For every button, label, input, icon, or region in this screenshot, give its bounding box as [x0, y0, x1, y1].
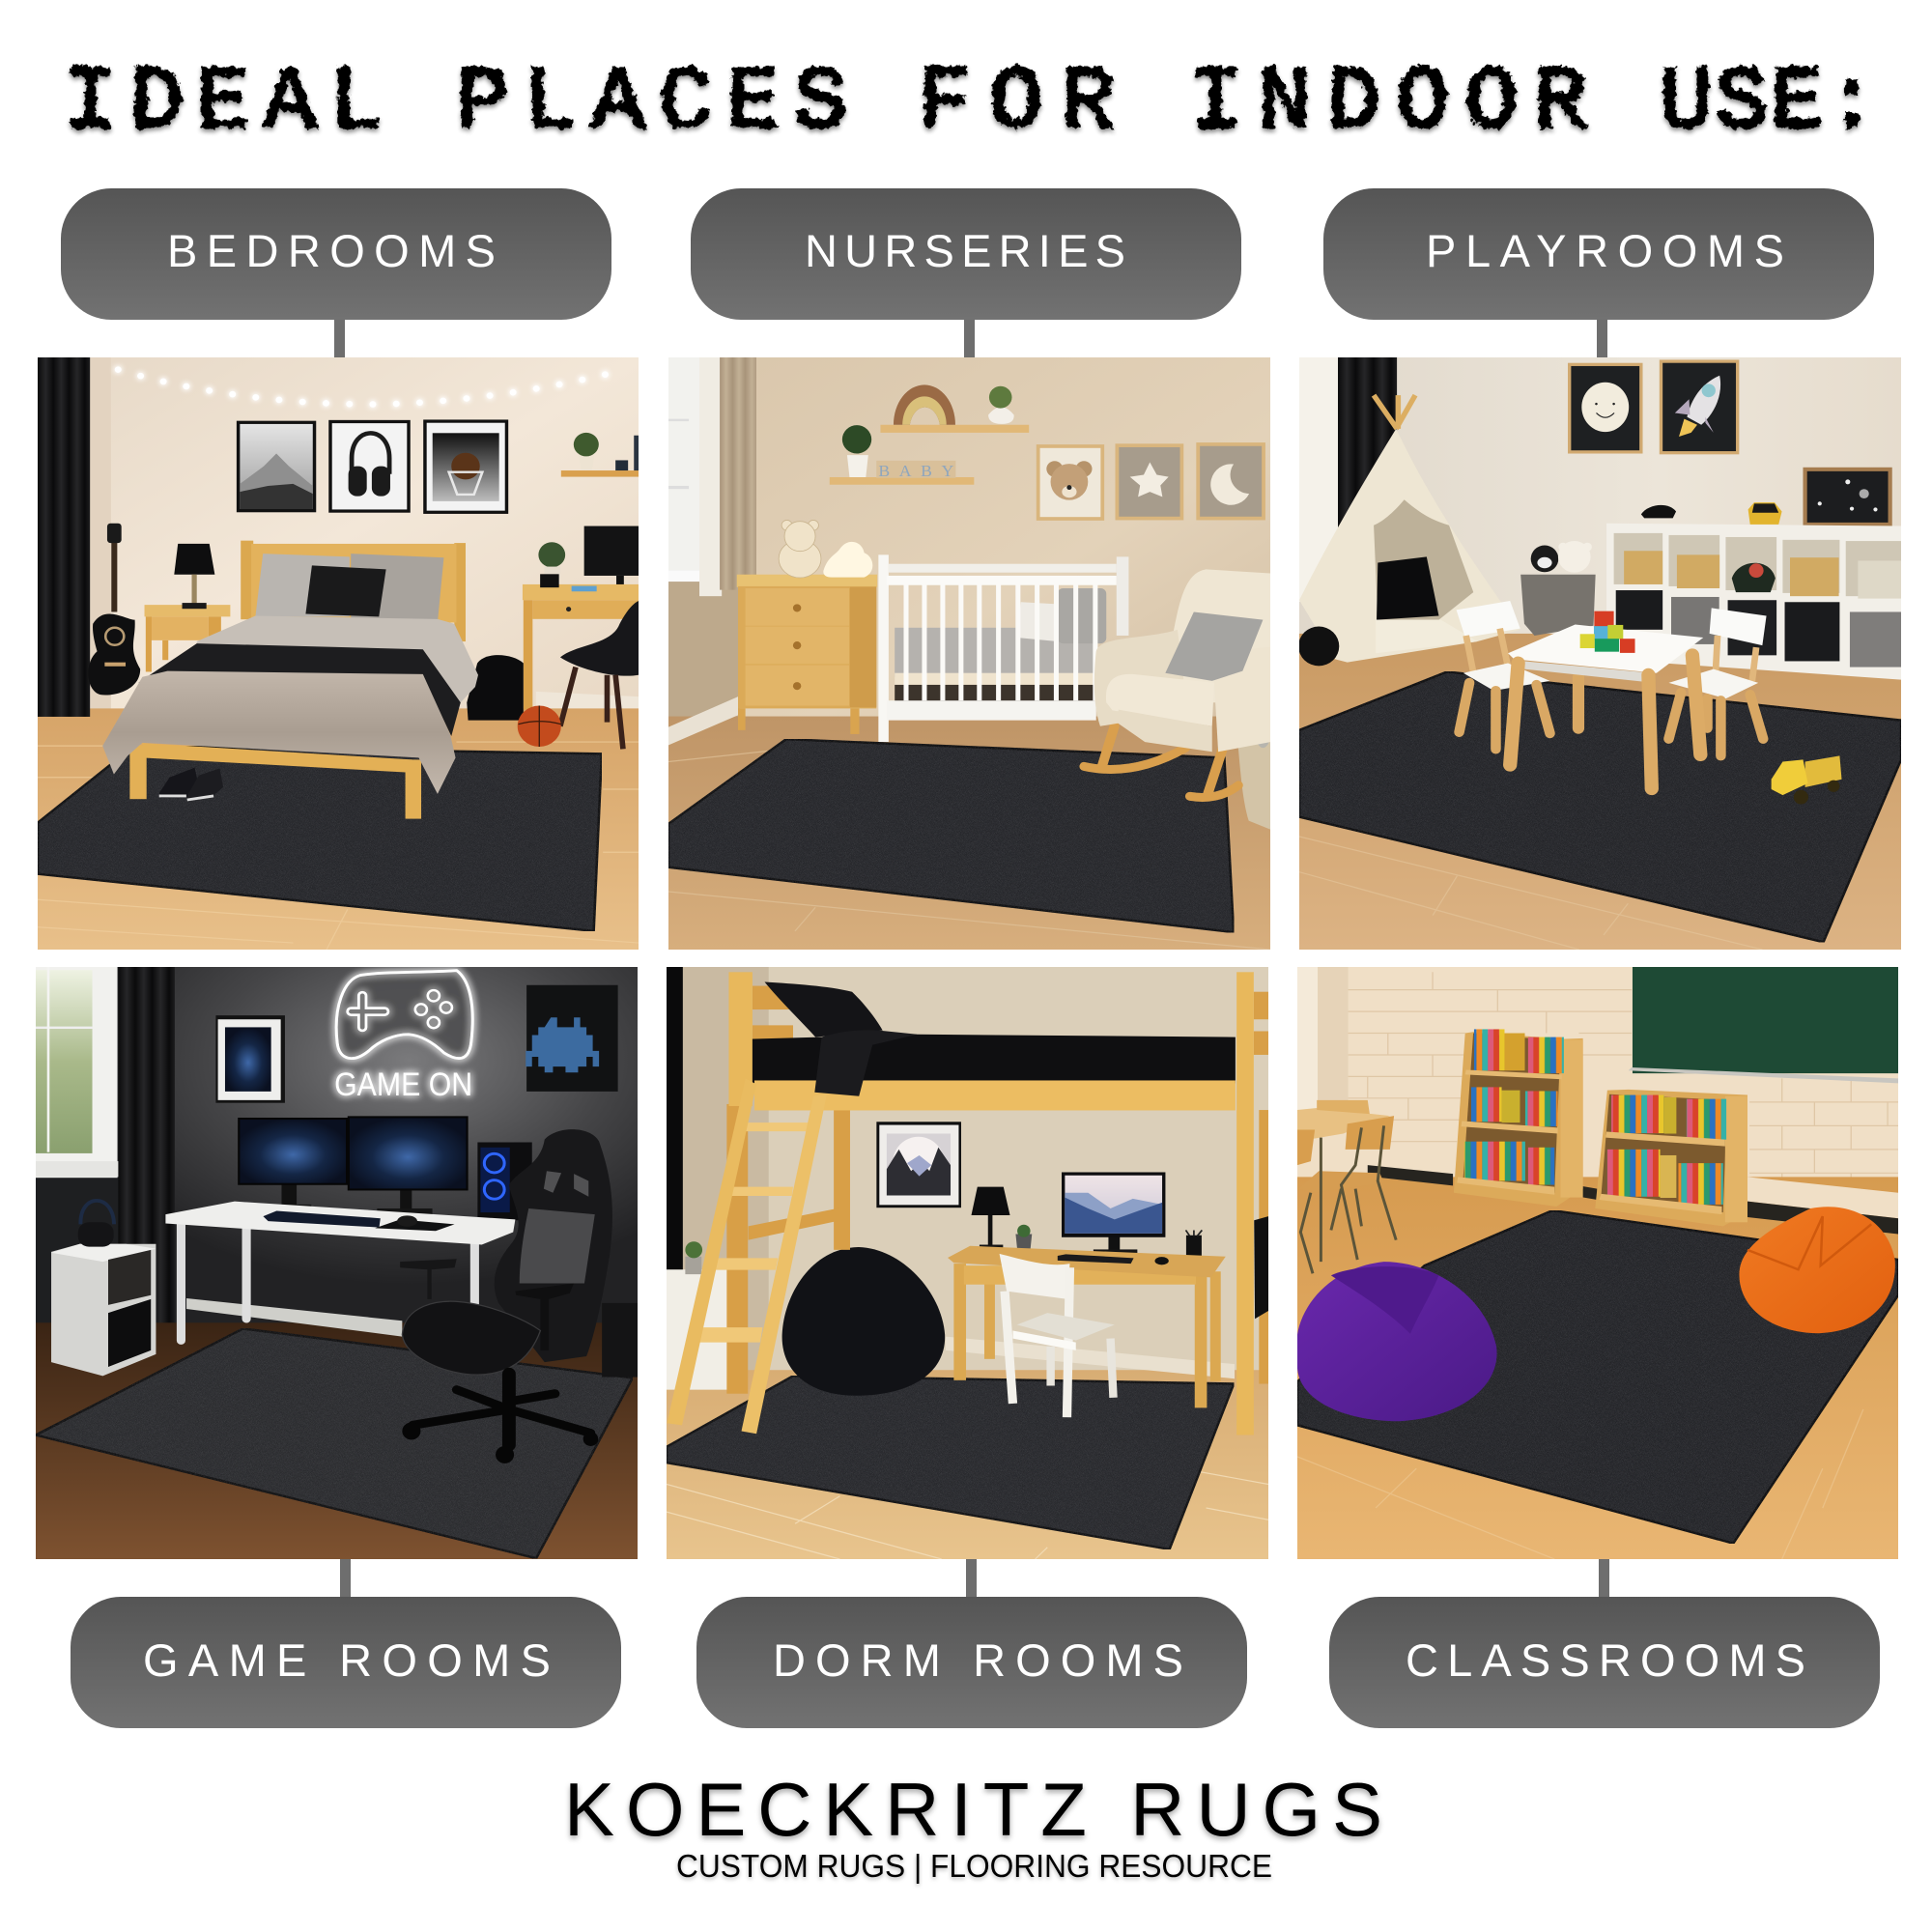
monitors	[239, 1117, 468, 1215]
label: game rooms: GAME ROOMS	[143, 1634, 551, 1686]
shelf lower: BABY	[878, 461, 954, 480]
blanket	[814, 1030, 917, 1096]
pen holder	[1185, 1230, 1202, 1257]
pillows	[255, 554, 443, 622]
window	[36, 967, 120, 1178]
label: nurseries	[691, 188, 1241, 357]
toy cars	[1641, 502, 1782, 525]
teddy bear	[779, 520, 821, 578]
purple beanbag	[1297, 1262, 1497, 1421]
dark curtain	[1338, 357, 1397, 530]
loft bed back rails	[726, 986, 1268, 1394]
basketball	[518, 706, 561, 747]
title: PLACES	[456, 52, 847, 154]
art: mountains	[876, 1122, 961, 1208]
table lamp	[174, 544, 214, 609]
rug	[36, 1328, 633, 1558]
title: USE:	[1660, 52, 1879, 154]
play table	[1508, 625, 1703, 788]
label: playrooms	[1323, 188, 1874, 357]
tall bookcase	[1454, 1029, 1583, 1207]
chalkboard	[1629, 967, 1898, 1083]
label: classrooms: CLASSROOMS	[1406, 1634, 1805, 1686]
yellow toy truck	[1772, 755, 1842, 805]
shelf upper	[880, 384, 1029, 433]
string lights	[118, 370, 616, 405]
panel: bedroom photo	[38, 357, 639, 950]
nightstand	[145, 605, 230, 671]
orange beanbag	[1739, 1207, 1895, 1333]
rug	[1299, 671, 1901, 942]
sheer curtain	[699, 357, 722, 596]
wall art: mountain	[237, 421, 316, 512]
loft mattress	[750, 1035, 1236, 1083]
label: classrooms	[1329, 1559, 1880, 1728]
monitor	[1062, 1172, 1165, 1254]
desk	[948, 1246, 1226, 1407]
low bookcase	[1595, 1090, 1747, 1226]
table and chairs	[1297, 1100, 1396, 1273]
dresser	[737, 575, 877, 734]
panel: classroom photo	[1297, 967, 1898, 1559]
desk and monitor	[523, 526, 639, 710]
black ball	[1298, 627, 1339, 666]
label: bedrooms: BEDROOMS	[167, 225, 496, 276]
art: bear	[1037, 444, 1104, 521]
bucket with plush toys	[1520, 541, 1596, 636]
label: dorm rooms: DORM ROOMS	[773, 1634, 1183, 1686]
title	[64, 52, 1879, 154]
baseboard	[1368, 1165, 1898, 1235]
table lamp	[972, 1187, 1010, 1250]
backpack	[467, 655, 524, 721]
sheer curtain	[1299, 357, 1338, 602]
left chair	[1457, 601, 1549, 749]
potted plant	[1015, 1225, 1032, 1250]
cube storage	[1606, 524, 1901, 680]
dark crate	[602, 1303, 638, 1378]
wall behind right bookcase	[1747, 1177, 1898, 1218]
rug	[38, 746, 602, 931]
cloud lamp	[823, 542, 872, 578]
loft beam	[754, 1080, 1236, 1110]
label: nurseries: NURSERIES	[805, 225, 1125, 276]
label: dorm rooms	[696, 1559, 1247, 1728]
ladder	[667, 1078, 827, 1434]
panel: game room photo	[36, 967, 638, 1559]
bed headboard	[241, 541, 466, 641]
space invader art	[526, 985, 618, 1092]
art: moon	[1196, 442, 1265, 520]
sneakers	[159, 768, 223, 801]
teepee	[1299, 395, 1520, 663]
art: smiling moon	[1568, 363, 1643, 454]
label: game rooms	[71, 1559, 621, 1728]
framed space art	[215, 1015, 285, 1103]
bag on loft	[1254, 1216, 1268, 1319]
rug	[668, 739, 1234, 932]
right chair	[1668, 608, 1767, 755]
loft posts	[728, 972, 1254, 1435]
wall art: basketball hoop	[423, 419, 508, 514]
panel: nursery photo	[668, 357, 1270, 950]
beanbag	[782, 1247, 945, 1396]
brand name: KOECKRITZ RUGS	[564, 1767, 1382, 1852]
panel: playroom photo	[1299, 357, 1901, 950]
art: star	[1116, 443, 1183, 520]
baseboard	[186, 1298, 402, 1337]
white chair	[1000, 1254, 1115, 1417]
brick lines	[1349, 972, 1898, 1197]
rug	[667, 1376, 1234, 1549]
guitar	[88, 524, 140, 695]
duvet and black throw	[102, 616, 478, 794]
linen curtain	[720, 357, 756, 590]
art: rocket	[1660, 359, 1739, 454]
desk chair	[560, 601, 639, 749]
rocking chair	[1094, 569, 1270, 752]
pc tower	[477, 1142, 532, 1220]
baseboard	[946, 1337, 1235, 1378]
brand tagline: CUSTOM RUGS | FLOORING RESOURCE	[676, 1848, 1272, 1884]
rocking chair rockers	[1084, 726, 1238, 797]
white cabinet and plant	[667, 1241, 727, 1390]
wall shelf	[561, 433, 639, 477]
wicker basket	[1237, 704, 1272, 830]
panel: dorm room photo	[667, 967, 1268, 1559]
gaming chair	[400, 1129, 612, 1463]
rug	[1297, 1210, 1898, 1544]
title: FOR	[918, 52, 1115, 154]
curtain	[38, 357, 90, 717]
crib	[878, 554, 1128, 742]
label: bedrooms	[61, 188, 611, 357]
neon sign	[334, 971, 472, 1103]
toy blocks	[1580, 611, 1635, 653]
neon sign: GAME ON	[334, 1066, 472, 1103]
title: INDOOR	[1189, 52, 1587, 154]
bed frame	[129, 743, 421, 819]
baseboard	[668, 696, 738, 745]
desk	[165, 1202, 515, 1341]
curtain	[118, 967, 175, 1323]
side cabinet and headset	[51, 1201, 156, 1376]
loft pillow	[765, 981, 883, 1037]
shelf lower	[830, 425, 974, 485]
title: IDEAL	[64, 52, 383, 154]
label: playrooms: PLAYROOMS	[1426, 225, 1784, 276]
chalk board	[1803, 468, 1892, 526]
wall art: headphones	[328, 420, 411, 513]
